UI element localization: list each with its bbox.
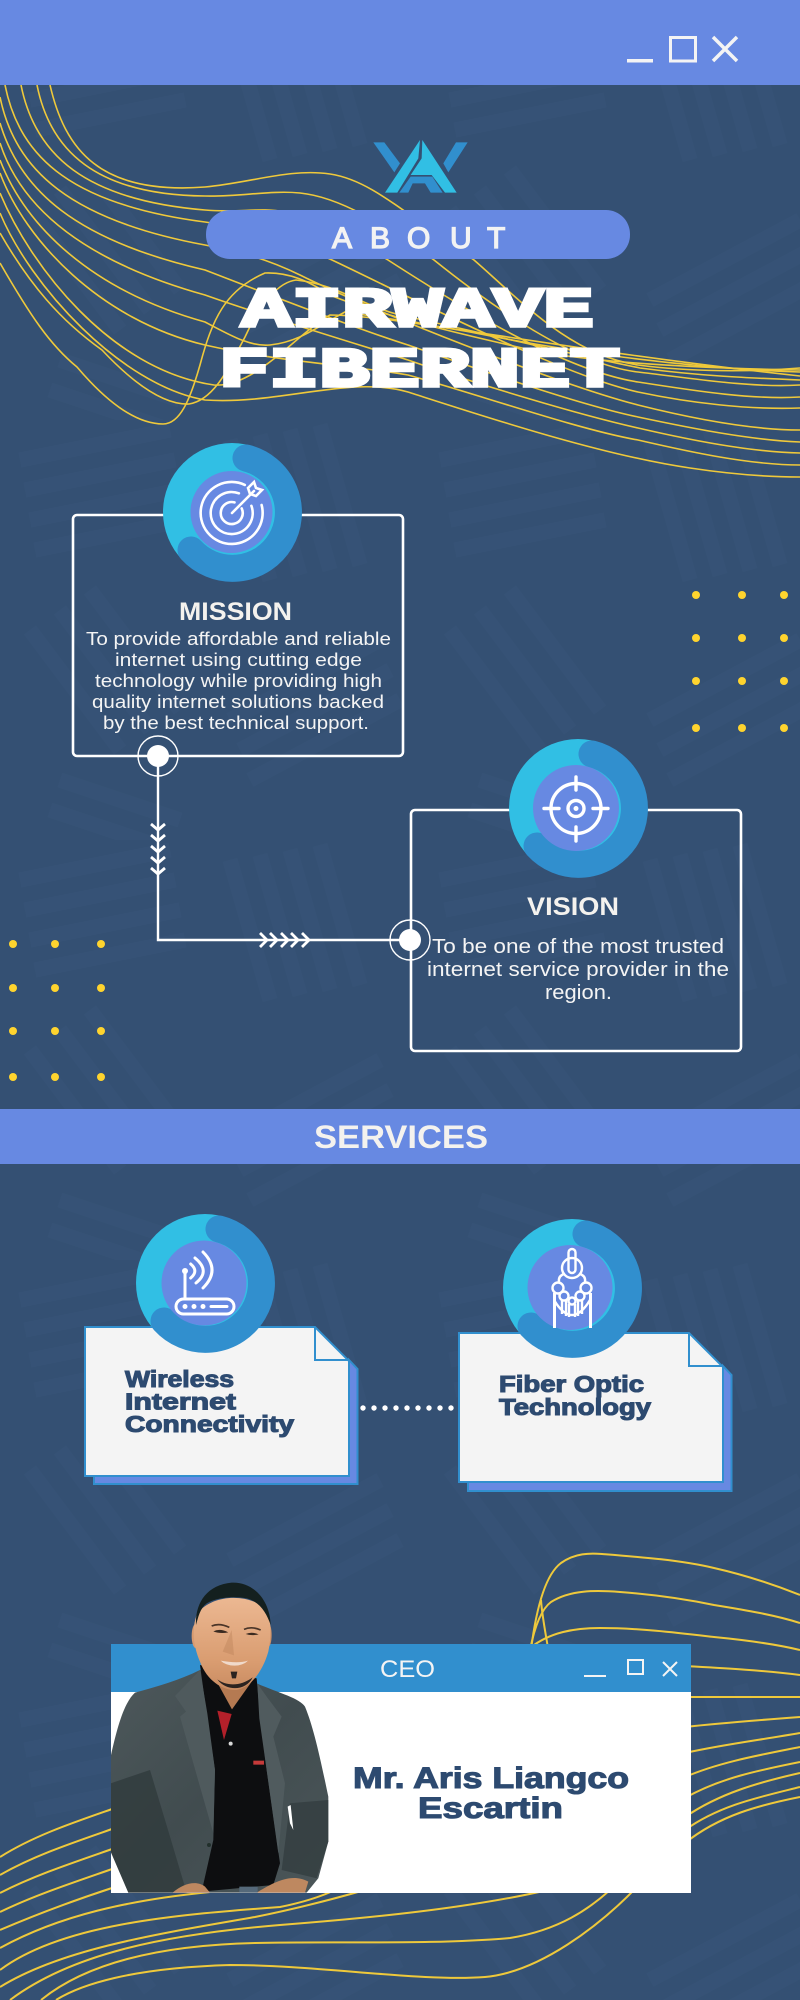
icon: router [136,1214,274,1352]
text: vision body: region. [545,982,612,1004]
title: AIRWAVE [242,279,594,343]
services banner [0,1109,800,1164]
text: mission body: internet using cutting edge [115,649,362,670]
text: mission body [86,628,391,733]
text: vision body: internet service provider in the [427,959,729,981]
text: mission body: technology while providing high [95,670,382,691]
panel: vision [411,739,741,1051]
services banner: SERVICES [314,1119,488,1155]
about pill: ABOUT [332,222,505,255]
about pill [206,210,630,259]
yellow wave lines: top [0,85,800,477]
heading: mission: MISSION [179,598,292,626]
text: ceo label: CEO [380,1656,435,1683]
connector from mission to vision [138,736,430,960]
yellow wave lines: bottom [0,1554,800,2000]
text: vision body: To be one of the most trusted [432,936,724,958]
heading: vision: VISION [527,893,619,921]
text: wireless [125,1366,294,1437]
card: wireless [85,1214,358,1484]
panel: ceo window [111,1644,691,1893]
text: mission body: To provide affordable and reliable [86,628,391,649]
logo [373,140,468,193]
text: mission body: quality internet solutions backed [92,691,384,712]
decorative dots right [692,591,788,732]
dotted link between services [360,1405,454,1411]
window controls [584,1660,677,1676]
text: fiber optic: Fiber Optic [499,1371,644,1397]
icon: fiber cable [503,1219,641,1357]
portrait of the ceo [111,1583,328,1893]
title: FIBERNET [219,339,620,403]
text: wireless: Wireless [125,1366,234,1392]
text: vision body [427,936,729,1004]
text: ceo name [353,1762,629,1825]
text: fiber optic [499,1371,651,1420]
text: wireless: Connectivity [125,1411,294,1437]
text: fiber optic: Technology [499,1394,651,1420]
text: mission body: by the best technical support. [103,712,369,733]
text: wireless: Internet [125,1388,236,1414]
top window bar [0,0,800,85]
text: ceo name: Mr. Aris Liangco [353,1762,629,1795]
decorative dots left [9,940,105,1081]
panel: mission [73,443,403,756]
text: ceo name: Escartin [418,1792,563,1825]
title [219,279,620,403]
card: fiber optic [459,1219,732,1491]
icon: vision crosshair [509,739,647,877]
icon: mission target [163,443,301,581]
